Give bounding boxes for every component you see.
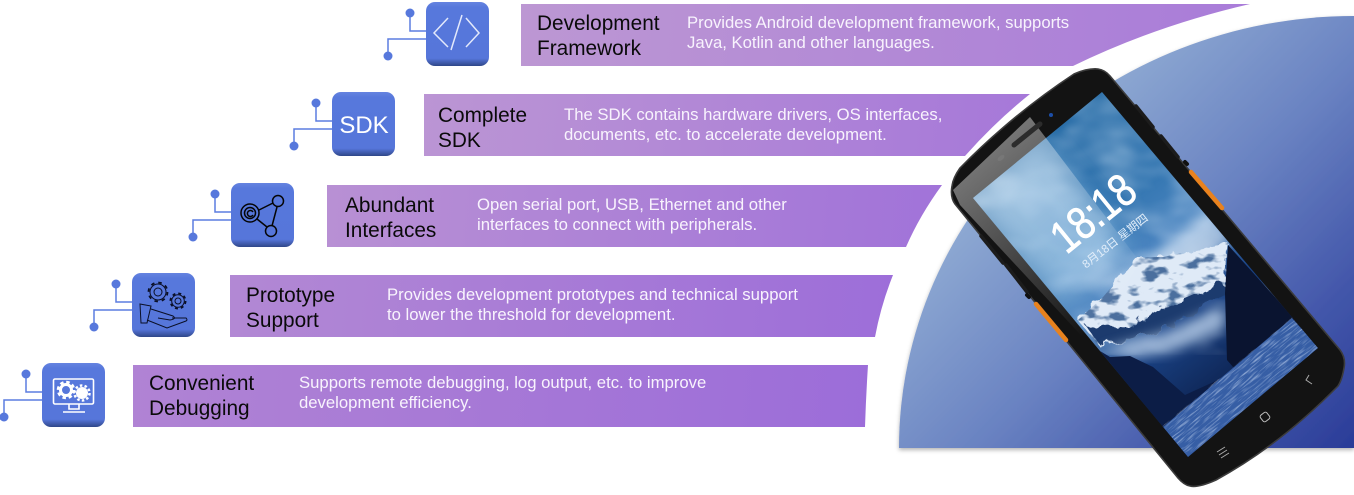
glass reflection xyxy=(953,117,1140,345)
bar: Abundant Interfaces: Interfaces xyxy=(345,219,436,242)
bar: Complete SDK: SDK xyxy=(438,129,481,152)
icon: gears and hand xyxy=(90,273,195,337)
bar: Convenient Debugging: development efficiency. xyxy=(299,393,472,412)
bar: Development Framework: Framework xyxy=(537,37,642,60)
bar: Development Framework: Provides Android development framework, supports xyxy=(687,13,1069,32)
bar: Complete SDK: The SDK contains hardware drivers, OS interfaces, xyxy=(564,105,942,124)
bar: Prototype Support: Prototype xyxy=(246,284,335,307)
icon: SDK xyxy=(290,92,395,156)
dark foreground hills xyxy=(1225,245,1300,375)
clock time: 18:18 xyxy=(1040,163,1146,263)
front camera xyxy=(1049,113,1053,117)
icon: SDK: SDK xyxy=(339,112,389,139)
sensor xyxy=(996,154,1006,162)
earpiece xyxy=(1014,124,1040,145)
icon: monitor with gears xyxy=(0,363,105,427)
bar: Prototype Support xyxy=(230,275,893,337)
nav key: back xyxy=(1306,375,1312,384)
clock date: 8月18日 星期四 xyxy=(1080,212,1151,271)
panel: blue curved backdrop xyxy=(899,16,1354,448)
phone xyxy=(951,69,1344,486)
bar: Abundant Interfaces: Abundant xyxy=(345,194,434,217)
bar: Prototype Support: to lower the threshold for development. xyxy=(387,305,676,324)
bar: Abundant Interfaces xyxy=(327,185,942,247)
bar: Development Framework xyxy=(521,4,1250,66)
nav key: menu xyxy=(1217,447,1229,458)
bar: Prototype Support: Provides development prototypes and technical support xyxy=(387,285,798,304)
bar: Development Framework: Development xyxy=(537,12,660,35)
bar: Complete SDK: documents, etc. to accelerate development. xyxy=(564,125,887,144)
bar: Prototype Support: Support xyxy=(246,309,319,332)
nav key: home xyxy=(1259,411,1271,423)
bright cloud band xyxy=(1124,208,1233,274)
icon: code xyxy=(384,2,489,66)
water band xyxy=(1163,318,1320,460)
bar: Convenient Debugging xyxy=(133,365,868,427)
snow mountain xyxy=(1070,240,1235,358)
bar: Abundant Interfaces: Open serial port, USB, Ethernet and other xyxy=(477,195,787,214)
phone screen xyxy=(973,92,1318,457)
bar: Convenient Debugging: Convenient xyxy=(149,372,254,395)
phone side buttons xyxy=(981,106,1222,340)
bar: Development Framework: Java, Kotlin and other languages. xyxy=(687,33,935,52)
bar: Convenient Debugging: Debugging xyxy=(149,397,250,420)
bar: Abundant Interfaces: interfaces to connect with peripherals. xyxy=(477,215,757,234)
bar: Convenient Debugging: Supports remote debugging, log output, etc. to improve xyxy=(299,373,706,392)
bar: Complete SDK xyxy=(424,94,1030,156)
icon: interfaces network xyxy=(188,183,294,247)
phone body xyxy=(951,69,1344,486)
bar: Complete SDK: Complete xyxy=(438,104,527,127)
light sky haze xyxy=(975,140,1130,300)
